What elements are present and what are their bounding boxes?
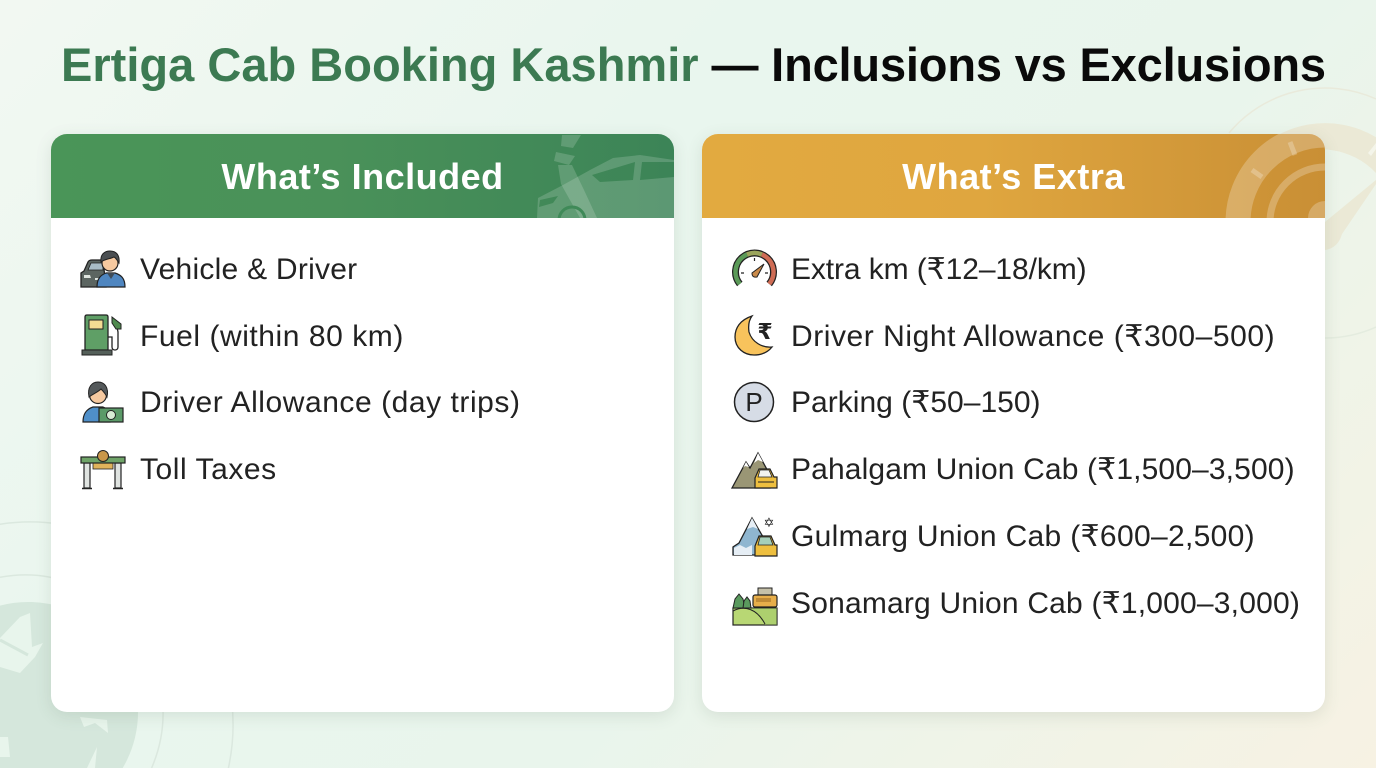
- item: driver night allowance: Driver Night Allowance (₹300–500): [791, 320, 1275, 353]
- item: gulmarg union cab: Gulmarg Union Cab (₹600–2,500): [791, 520, 1255, 553]
- header: what's included: What’s Included: [221, 156, 504, 197]
- item: toll taxes: Toll Taxes: [140, 453, 277, 486]
- icon: parking sign: [734, 382, 774, 422]
- item: parking: Parking (₹50–150): [791, 386, 1041, 419]
- header: what's extra: What’s Extra: [902, 156, 1125, 197]
- icon: speedometer: [732, 250, 777, 286]
- item: sonamarg union cab: Sonamarg Union Cab (₹1,000–3,000): [791, 587, 1300, 620]
- item: driver allowance: Driver Allowance (day trips): [140, 386, 521, 419]
- panel: what's extra: [702, 134, 1325, 712]
- icon: moon and rupee: [734, 314, 774, 356]
- item: fuel: Fuel (within 80 km): [140, 320, 404, 353]
- icon: moon and rupee: ₹: [757, 320, 773, 345]
- icon: toll gate: [80, 450, 126, 490]
- header watermark: car and arrow: [537, 135, 674, 218]
- icon: snow peak and taxi: [732, 516, 778, 557]
- item: fuel: [82, 314, 404, 356]
- header: what's included: [51, 134, 674, 218]
- panel: what's included: [51, 134, 674, 712]
- item: toll taxes: [80, 450, 277, 490]
- header watermark: speedometer: [1226, 134, 1325, 218]
- icon: trees, meadow and taxi: [732, 588, 778, 626]
- item: pahalgam union cab: Pahalgam Union Cab (₹1,500–3,500): [791, 453, 1295, 486]
- item: vehicle and driver: [80, 250, 357, 288]
- icon: driver with cash: [82, 382, 124, 423]
- title: Ertiga Cab Booking Kashmir — Inclusions vs Exclusions: [61, 38, 1326, 91]
- item: parking: [734, 382, 1041, 422]
- icon: fuel pump: [82, 314, 122, 356]
- icon: mountains and taxi: [731, 452, 778, 489]
- item: driver allowance: [82, 382, 521, 423]
- icon: car and driver: [80, 250, 126, 288]
- icon: parking sign: P: [745, 387, 763, 417]
- item: vehicle and driver: Vehicle & Driver: [140, 253, 357, 286]
- item: extra km: Extra km (₹12–18/km): [791, 253, 1086, 286]
- header: what's extra: [702, 134, 1325, 218]
- icon: snow peak and taxi: ✡: [764, 516, 774, 531]
